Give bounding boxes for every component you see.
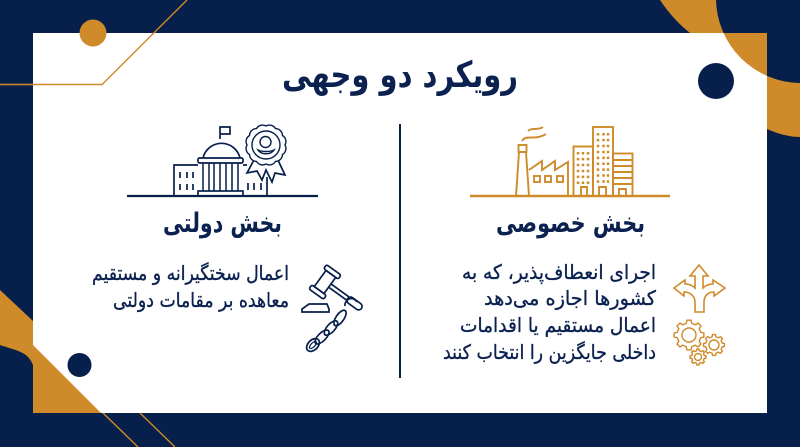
- heading: private sector: بخش خصوصی: [496, 208, 645, 239]
- icon: gavel and chain: [302, 265, 370, 354]
- orange lines bottom: [103, 413, 175, 447]
- private text block: اجرای انعطاف‌پذیر، که به: [462, 260, 656, 285]
- white panel: [33, 33, 767, 413]
- orange triangle bottom left: [33, 345, 101, 413]
- private text block: داخلی جایگزین را انتخاب کنند: [443, 340, 656, 364]
- orange circle top left: [80, 20, 106, 46]
- icon: three way arrows: [674, 265, 725, 312]
- government text block: [92, 261, 289, 312]
- center divider: [399, 124, 401, 378]
- navy circle top right: [716, 0, 800, 83]
- navy circle top right inside panel: [698, 63, 734, 99]
- government text block: معاهده بر مقامات دولتی: [113, 288, 289, 312]
- icon: government building and medal: [127, 125, 318, 196]
- orange wedge inside panel: [724, 33, 767, 76]
- private text block: [443, 260, 656, 364]
- orange blob top right: [660, 0, 800, 137]
- private text block: کشورها اجازه می‌دهد: [484, 286, 656, 310]
- orange shape bottom left outer: [0, 290, 33, 365]
- heading: government sector: بخش دولتی: [163, 208, 282, 239]
- title: رویکرد دو وجهی: [282, 55, 518, 96]
- orange line top left: [0, 0, 187, 84]
- navy circle bottom left: [68, 353, 92, 377]
- icon: gears: [674, 320, 724, 365]
- icon: factory and city buildings: [470, 127, 670, 196]
- private text block: اعمال مستقیم یا اقدامات: [460, 313, 656, 337]
- government text block: اعمال سختگیرانه و مستقیم: [92, 261, 289, 285]
